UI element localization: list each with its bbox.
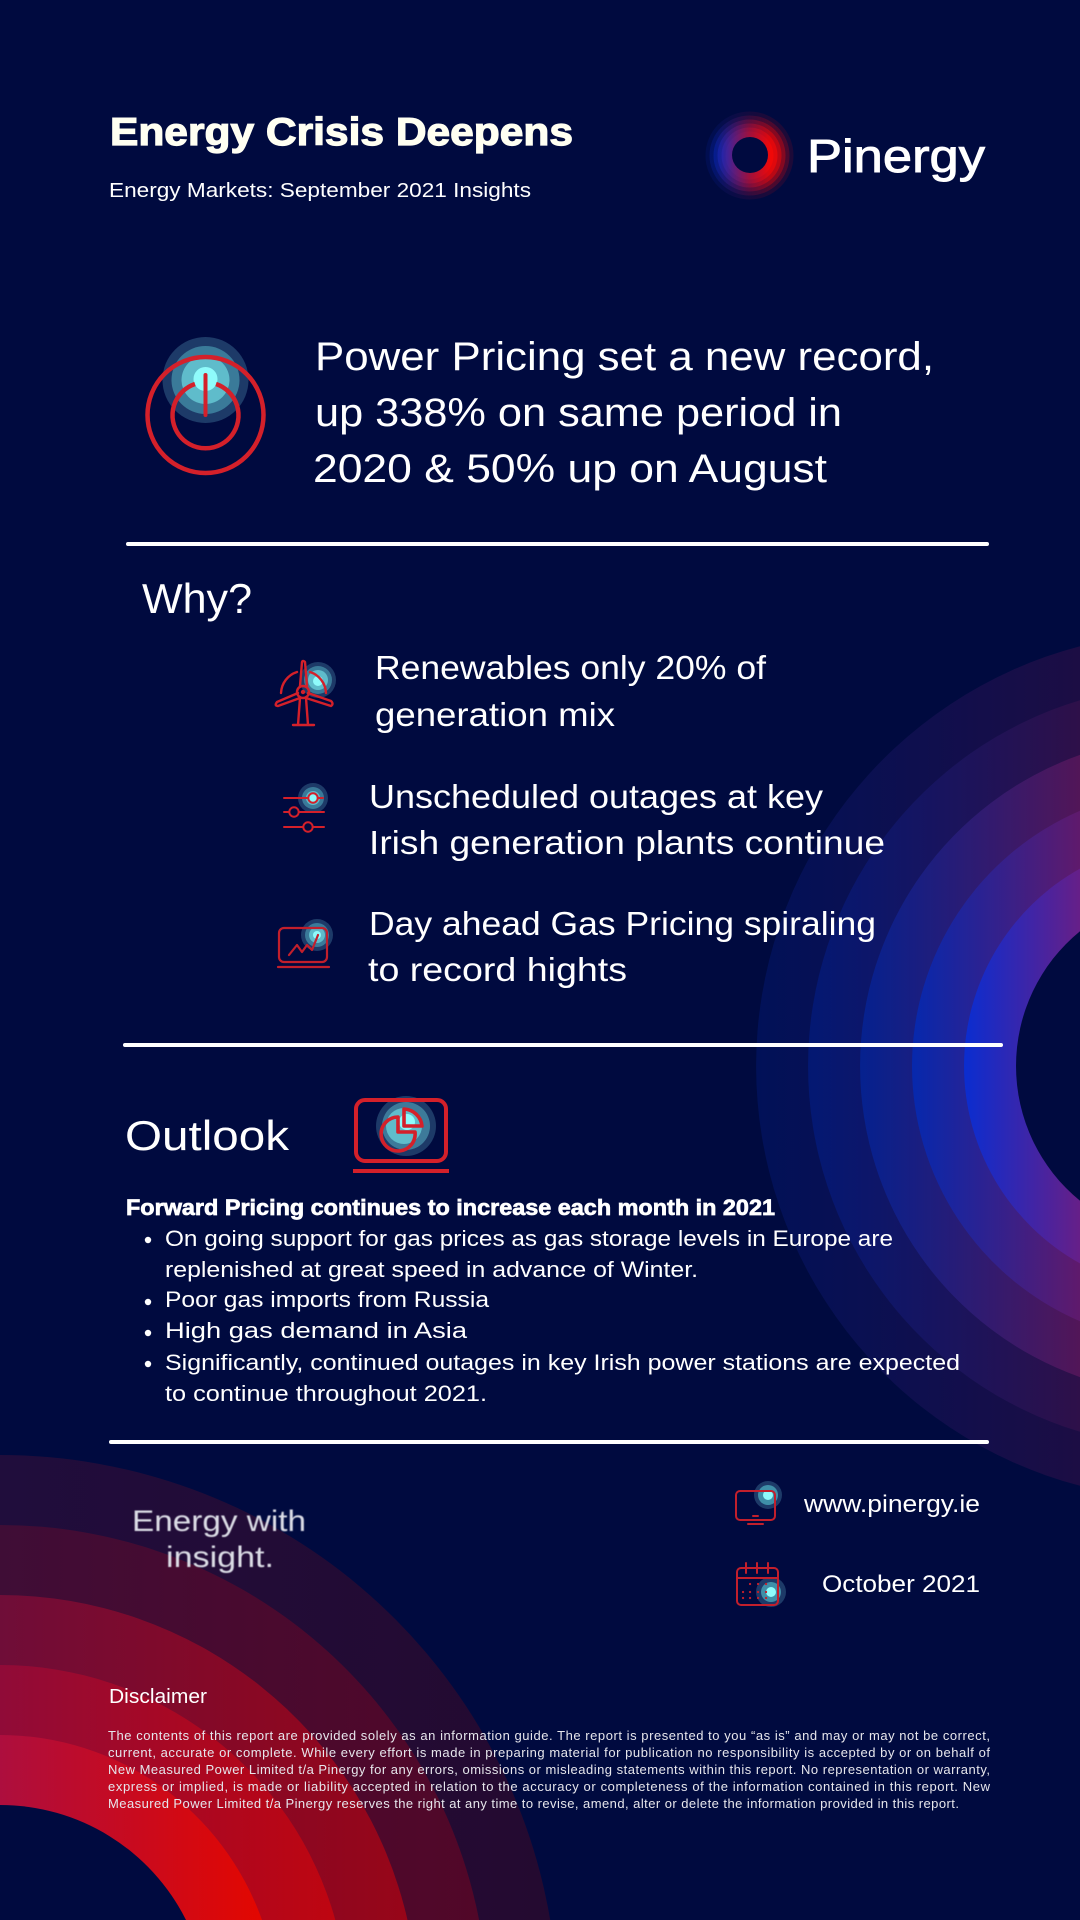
reason 3 text: to record hights	[368, 951, 627, 988]
heading: Why?: Why?	[142, 575, 252, 622]
icon: power button	[148, 337, 264, 473]
reason 2 text: Irish generation plants continue	[369, 824, 885, 861]
outlook bullet list: replenished at great speed in advance of Winter.	[165, 1257, 698, 1282]
outlook bullet list: High gas demand in Asia	[165, 1318, 468, 1343]
reason 3 text	[368, 905, 876, 988]
icon: wind turbine	[276, 661, 336, 725]
reason 2 text: Unscheduled outages at key	[369, 778, 824, 815]
tagline: Energy with insight	[132, 1505, 306, 1574]
outlook bold heading: Forward Pricing continues to increase each month in 2021	[126, 1195, 775, 1220]
subtitle: Energy Markets: September 2021 Insights	[109, 180, 531, 202]
title: Energy Crisis Deepens	[110, 111, 573, 154]
reason 2 text	[369, 778, 885, 861]
date text: October 2021	[822, 1571, 980, 1598]
icon: sliders	[284, 783, 328, 832]
headline text	[313, 335, 934, 491]
decorative right concentric arcs	[756, 646, 1080, 1486]
reason 1 text	[375, 649, 767, 733]
disclaimer body: current, accurate or complete. While every effort is made in preparing material for publication no responsibility is accepted by or on behalf of	[108, 1745, 990, 1760]
headline text: up 338% on same period in	[315, 391, 842, 435]
reason 3 text: Day ahead Gas Pricing spiraling	[369, 905, 876, 942]
outlook bullet list: Poor gas imports from Russia	[165, 1287, 490, 1312]
icon: chart on screen	[278, 919, 333, 967]
decorative bottom-left concentric arcs	[0, 1455, 550, 1920]
logo mark	[706, 112, 794, 200]
tagline: Energy with insight: insight.	[166, 1541, 274, 1574]
disclaimer heading: Disclaimer	[109, 1686, 207, 1708]
disclaimer body	[108, 1728, 991, 1811]
heading: Outlook: Outlook	[125, 1112, 290, 1159]
logo wordmark: Pinergy	[807, 130, 985, 182]
disclaimer body: Measured Power Limited t/a Pinergy reserves the right at any time to revise, amend, alter or delete the information provided in this report.	[108, 1796, 959, 1811]
disclaimer body: express or implied, is made or liability accepted in relation to the accuracy or completeness of the information contained in this report. New	[108, 1779, 991, 1794]
outlook bullet list	[145, 1226, 960, 1406]
headline text: 2020 & 50% up on August	[313, 447, 827, 491]
outlook bullet list: Significantly, continued outages in key Irish power stations are expected	[165, 1350, 960, 1375]
reason 1 text: generation mix	[375, 696, 616, 733]
website text: www.pinergy.ie	[803, 1491, 980, 1518]
logo: Pinergy	[706, 112, 985, 200]
disclaimer body: New Measured Power Limited t/a Pinergy for any errors, omissions or misleading statements within this report. No representation or warranty,	[108, 1762, 990, 1777]
reason 1 text: Renewables only 20% of	[375, 649, 767, 686]
outlook bullet list: to continue throughout 2021.	[165, 1381, 487, 1406]
headline text: Power Pricing set a new record,	[315, 335, 934, 379]
icon: pie chart on laptop	[353, 1096, 449, 1171]
icon: calendar	[737, 1563, 786, 1607]
disclaimer body: The contents of this report are provided solely as an information guide. The report is presented to you “as is” and may or may not be correct,	[108, 1728, 990, 1743]
tagline: Energy with insight: Energy with	[132, 1505, 306, 1538]
icon: monitor	[736, 1481, 782, 1524]
outlook bullet list: On going support for gas prices as gas storage levels in Europe are	[165, 1226, 893, 1251]
